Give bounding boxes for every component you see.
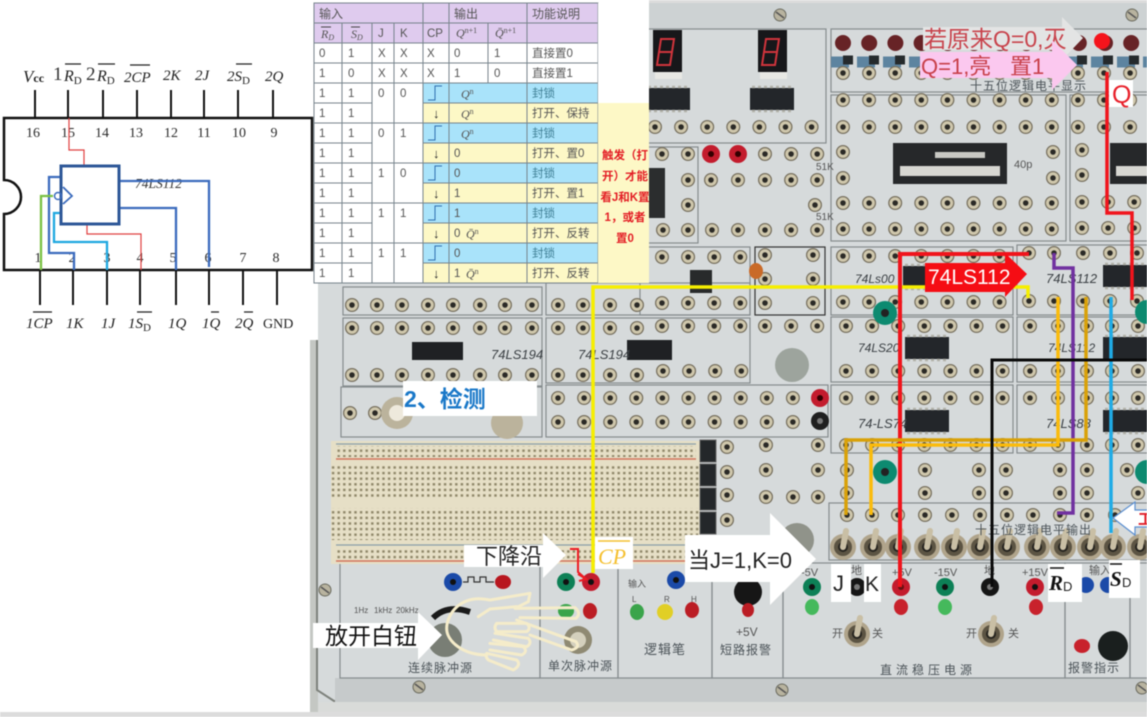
photo: experiment board background — [310, 3, 1147, 712]
table output column: Q — [461, 107, 470, 121]
top pin names: Vcc — [23, 67, 45, 86]
table RD and SD columns: 1 — [319, 268, 325, 280]
label box: RD: D — [1063, 579, 1072, 594]
printed board labels: 1Hz — [354, 606, 368, 615]
table CP rising and falling edges: ↓ — [433, 186, 440, 201]
printed board labels: 74Ls00 — [855, 272, 895, 286]
table output column: Q̄ — [466, 227, 475, 241]
chip pins — [35, 90, 277, 305]
table J and K columns: 0 — [378, 88, 384, 100]
resistor strip and LED row — [831, 43, 1147, 62]
bottom pin names: 2Q — [235, 316, 254, 332]
printed board labels: R — [664, 595, 670, 604]
table function column: 打开、反转 — [532, 266, 590, 280]
arrow: small red pointer to pulse socket — [570, 549, 586, 581]
label box: K: K — [865, 573, 879, 596]
top pin names: 2CP — [124, 70, 151, 86]
table CP rising and falling edges — [428, 86, 442, 281]
table output column: Q̄ — [466, 267, 475, 281]
table function column: 封锁 — [532, 206, 555, 220]
label box: RD: R — [1048, 571, 1063, 595]
callout: trigger note: 开）才能 — [602, 169, 648, 183]
table output column: n — [475, 267, 479, 276]
breadboard — [331, 440, 716, 564]
integrated circuits and sockets on board — [412, 87, 1147, 433]
label box: CP: CP — [598, 544, 626, 569]
table RD and SD columns: 1 — [348, 248, 354, 260]
arrow: falling edge — [464, 533, 566, 578]
table grid — [314, 3, 598, 283]
coloured internal connections — [41, 118, 209, 270]
wires — [593, 72, 1147, 587]
label box: 2 detection: 2、检测 — [404, 386, 486, 412]
table direct set and reset rows: 0 — [348, 68, 354, 80]
printed board labels: 74-LS74 — [858, 416, 907, 431]
table output column: 0 — [454, 168, 460, 180]
label box: SD: S — [1110, 567, 1122, 591]
table CP rising and falling edges: ↓ — [433, 106, 440, 121]
printed board labels: 关 — [872, 626, 883, 640]
printed board labels: -15V — [934, 567, 958, 579]
bottom control section: pulse sources and power terminals — [428, 571, 1128, 661]
flip-flop name: 74LS112 — [135, 176, 182, 191]
table header — [319, 6, 580, 42]
table CP rising and falling edges: ↓ — [433, 226, 440, 241]
table function column — [532, 86, 590, 280]
printed board labels: +5V — [736, 625, 758, 639]
pin numbers: 8 — [272, 251, 280, 266]
table output column: n — [470, 107, 474, 116]
table output column: n — [470, 87, 474, 96]
printed board labels: +15V — [1022, 567, 1049, 579]
bottom pin names: 1K — [66, 316, 84, 332]
board panel outlines — [340, 29, 1147, 678]
table direct set and reset rows: X — [378, 68, 386, 80]
callout: trigger note: 置0 — [616, 232, 634, 245]
table direct set and reset rows: X — [400, 48, 408, 60]
table direct set and reset rows: X — [427, 48, 435, 60]
table RD and SD columns: 1 — [319, 248, 325, 260]
table header: S — [351, 27, 357, 41]
wire: CP yellow — [593, 287, 1028, 573]
label box: J: J — [833, 571, 844, 596]
pin numbers: 15 — [61, 126, 75, 141]
callout: trigger note: 1，或者 — [605, 210, 645, 224]
table J and K columns: 0 — [400, 168, 406, 180]
printed board labels: 直流稳压电源 — [880, 662, 976, 677]
printed board labels: 十五位逻辑电平输出 — [975, 522, 1092, 537]
pin numbers: 6 — [204, 251, 212, 266]
table direct set and reset rows: 0 — [319, 48, 325, 60]
arrow: result note — [920, 40, 1077, 90]
bottom pin names: 1Q — [202, 316, 220, 332]
bottom pin names: 1Q — [168, 316, 186, 332]
screws — [319, 9, 1147, 696]
printed board labels: 74LS88 — [1046, 416, 1092, 431]
label box: 2 detection — [403, 381, 537, 416]
table header: D — [327, 33, 334, 42]
arrow: right-edge pointer — [1113, 502, 1147, 535]
top pin names: 2Q — [265, 69, 284, 85]
table CP rising and falling edges: ↓ — [433, 146, 440, 161]
label box: CP — [595, 537, 633, 569]
table output column: Q — [461, 127, 470, 141]
printed board labels: 40p — [1014, 159, 1032, 171]
table direct set and reset rows: 0 — [454, 48, 460, 60]
arrow: falling edge: 下降沿 — [476, 544, 542, 569]
top pin names: R — [64, 68, 74, 85]
wire: RD purple — [1054, 253, 1073, 513]
pin numbers: 11 — [197, 126, 211, 141]
table output column: n — [470, 127, 474, 136]
table direct set and reset rows: X — [378, 48, 386, 60]
bottom pin names: GND — [263, 317, 293, 332]
table RD and SD columns: 1 — [348, 228, 354, 240]
table J and K columns: 1 — [378, 168, 384, 180]
indicator: lit red LED — [1094, 33, 1110, 49]
table header: CP — [427, 28, 443, 40]
pin numbers: 10 — [232, 126, 246, 141]
table header: Q̄ — [495, 26, 504, 40]
table direct set and reset rows — [319, 46, 573, 80]
printed board labels: 开 — [832, 628, 843, 640]
table RD and SD columns: 1 — [319, 208, 325, 220]
label box: RD — [1048, 564, 1082, 602]
bottom pin names — [26, 312, 293, 334]
printed board labels: 74LS112 — [1046, 271, 1098, 286]
table function column: 打开、置0 — [532, 146, 584, 160]
pin numbers: 5 — [170, 251, 176, 266]
printed board labels — [354, 78, 1120, 677]
table RD and SD columns: 1 — [348, 268, 354, 280]
table output column: 0 — [454, 148, 460, 160]
table direct set and reset rows: 0 — [494, 68, 500, 80]
function table — [314, 3, 598, 283]
table RD and SD columns: 1 — [319, 228, 325, 240]
arrow: original state note — [923, 17, 1083, 60]
arrow: 74LS112 label — [925, 253, 1027, 297]
printed board labels: 1kHz — [374, 606, 392, 615]
printed board labels: 输入 — [628, 578, 646, 589]
pin numbers: 12 — [164, 126, 178, 141]
arrow: J=1, K=0 condition: 当J=1,K=0 — [688, 548, 792, 573]
table direct set and reset rows: X — [427, 68, 435, 80]
table header: D — [356, 33, 363, 42]
table direct set and reset rows: 1 — [348, 48, 354, 60]
table J and K columns: 1 — [400, 208, 406, 220]
chip body — [4, 118, 312, 270]
printed board labels: 报警指示 — [1068, 660, 1120, 675]
wire: J dark orange — [846, 297, 1086, 515]
table RD and SD columns: 1 — [319, 128, 325, 140]
pin numbers: 7 — [240, 251, 246, 266]
table output column: 1 — [454, 268, 460, 280]
icon: hand pressing button — [447, 593, 579, 670]
table header: R — [321, 27, 328, 41]
printed board labels: L — [632, 595, 637, 604]
top pin names — [23, 64, 284, 87]
printed board labels: 十五位逻辑电平显示 — [970, 78, 1087, 93]
printed board labels: 51K — [816, 212, 834, 223]
top pin names: D — [107, 75, 115, 87]
table function column: 封锁 — [532, 166, 555, 180]
table function column: 封锁 — [532, 126, 555, 140]
table function column: 打开、反转 — [532, 226, 590, 240]
arrow: original state note: 若原来Q=0,灭 — [924, 26, 1067, 52]
arrow: J=1, K=0 condition — [685, 513, 816, 605]
label box: J — [831, 564, 851, 602]
wire: SD blue — [1109, 297, 1113, 533]
table header: K — [400, 28, 408, 40]
table output column: Q — [461, 87, 470, 101]
table J and K columns: 0 — [400, 88, 406, 100]
arrow: release white button — [313, 612, 442, 660]
table RD and SD columns: 1 — [348, 108, 354, 120]
board banana-socket holes — [350, 73, 1138, 520]
arrow: 74LS112 label: 74LS112 — [928, 266, 1011, 289]
wire: ground black — [992, 360, 1147, 587]
white panel: pinout background — [0, 0, 318, 340]
pin numbers: 4 — [136, 251, 144, 266]
wire: power red — [900, 254, 1029, 587]
top pin names: 1 — [53, 64, 62, 85]
arrow: release white button: 放开白钮 — [325, 623, 417, 649]
printed board labels: -5V — [801, 567, 819, 579]
bottom pin names: 1S — [128, 316, 143, 332]
table header: 功能说明 — [532, 6, 580, 21]
table RD and SD columns: 1 — [319, 148, 325, 160]
bottom pin names: D — [143, 322, 151, 334]
table direct set and reset rows: X — [400, 68, 408, 80]
round terminals, capacitor and knobs — [381, 145, 1147, 557]
table RD and SD columns: 1 — [348, 128, 354, 140]
table direct set and reset rows: 直接置1 — [532, 66, 573, 80]
table RD and SD columns: 1 — [319, 168, 325, 180]
label: Q: Q — [1112, 81, 1131, 109]
bottom pin names: 1CP — [26, 316, 53, 332]
wire: K orange — [871, 297, 1058, 515]
printed board labels: 地 — [984, 564, 995, 577]
table header: n+1 — [465, 26, 477, 35]
table output column — [454, 87, 479, 281]
printed board labels: 74LS20 — [858, 341, 900, 355]
table output column: n — [475, 227, 479, 236]
pin numbers: 16 — [26, 126, 40, 141]
top pin names: 2 — [86, 64, 96, 85]
white block beside table top — [598, 3, 649, 103]
table direct set and reset rows: 1 — [494, 48, 500, 60]
table direct set and reset rows: 1 — [454, 68, 460, 80]
table J and K columns — [378, 88, 406, 260]
pin numbers: 13 — [129, 126, 143, 141]
pin numbers: 9 — [270, 126, 278, 141]
callout: trigger note: 触发（打 — [602, 148, 648, 162]
table output column: 1 — [454, 208, 460, 220]
printed board labels: 开 — [966, 628, 977, 640]
flip-flop block — [54, 166, 119, 224]
printed board labels: 连续脉冲源 — [408, 660, 473, 675]
table RD and SD columns: 1 — [348, 208, 354, 220]
top pin names: R — [97, 68, 107, 85]
top pin names: D — [74, 75, 82, 87]
callout: trigger note: 看J和K置 — [600, 190, 650, 204]
table RD and SD columns: 1 — [348, 88, 354, 100]
printed board labels: 74LS194 — [491, 347, 543, 362]
table RD and SD columns: 1 — [319, 188, 325, 200]
callout: trigger note — [598, 103, 650, 283]
table header: J — [378, 28, 384, 40]
printed board labels: 地 — [851, 564, 862, 577]
printed board labels: 输入 — [1089, 563, 1111, 577]
table fills — [314, 3, 598, 283]
table RD and SD columns: 1 — [348, 168, 354, 180]
pin numbers: 3 — [104, 251, 110, 266]
table J and K columns: 0 — [378, 128, 384, 140]
table header: 输出 — [454, 6, 478, 21]
printed board labels: 单次脉冲源 — [548, 658, 613, 673]
label box: K — [864, 564, 881, 602]
table CP rising and falling edges: ↓ — [433, 266, 440, 281]
printed board labels: 短路报警 — [720, 642, 772, 657]
table RD and SD columns: 1 — [319, 108, 325, 120]
table header: n+1 — [504, 26, 516, 35]
table function column: 封锁 — [532, 86, 555, 100]
printed board labels: 关 — [1008, 626, 1019, 640]
top pin names: 2K — [163, 68, 182, 84]
table direct set and reset rows: 直接置0 — [532, 46, 573, 60]
table RD and SD columns — [319, 88, 354, 280]
printed board labels: 74LS112 — [1048, 341, 1095, 355]
table function column: 打开、保持 — [532, 106, 590, 120]
top pin names: 2S — [227, 69, 242, 85]
printed board labels: 51K — [816, 162, 834, 173]
printed board labels: H — [691, 595, 697, 604]
printed board labels: 20kHz — [396, 606, 419, 615]
table header: 输入 — [319, 6, 343, 21]
label box: SD — [1109, 560, 1140, 598]
table RD and SD columns: 1 — [348, 188, 354, 200]
table J and K columns: 1 — [400, 248, 406, 260]
pin numbers — [26, 126, 280, 266]
wire: Q output red — [1107, 72, 1132, 300]
table output column: 0 — [454, 248, 460, 260]
top pin names: D — [242, 75, 250, 87]
arrow: result note: Q=1,亮 — [921, 54, 991, 79]
table J and K columns: 1 — [378, 248, 384, 260]
printed board labels: 74LS194 — [578, 347, 630, 362]
table output column: 1 — [454, 188, 460, 200]
bottom pin names: 1J — [101, 316, 116, 332]
table J and K columns: 1 — [378, 208, 384, 220]
table function column: 打开、置1 — [532, 186, 584, 200]
table RD and SD columns: 1 — [348, 148, 354, 160]
toggle switches row — [830, 531, 1147, 560]
seven-segment displays — [640, 30, 787, 218]
table header: Q — [456, 26, 465, 40]
table output column: 0 — [454, 228, 460, 240]
table direct set and reset rows: 1 — [319, 68, 325, 80]
printed board labels: 逻辑笔 — [644, 642, 686, 657]
table RD and SD columns: 1 — [319, 88, 325, 100]
label box: SD: D — [1122, 575, 1131, 590]
pin numbers: 2 — [68, 251, 76, 266]
arrow: result note: 置1 — [1010, 54, 1044, 79]
table function column: 封锁 — [532, 246, 555, 260]
pinout diagram: 74LS112 chip — [4, 64, 312, 334]
table J and K columns: 1 — [400, 128, 406, 140]
printed board labels: +5V — [892, 567, 913, 579]
pin numbers: 1 — [34, 251, 42, 266]
top pin names: 2J — [195, 68, 210, 84]
pin numbers: 14 — [95, 126, 109, 141]
